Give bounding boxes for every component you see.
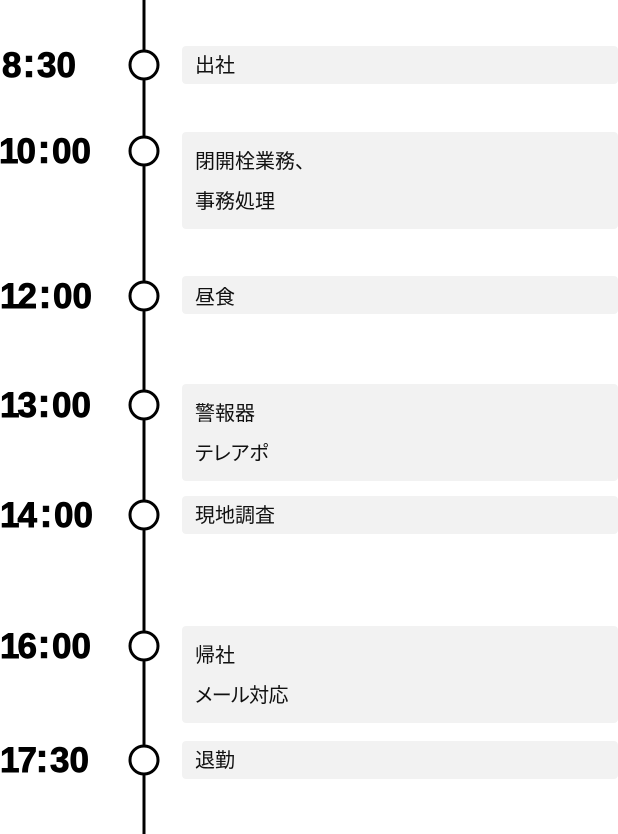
time: 13:00: : — [37, 379, 51, 426]
task: 退勤 — [182, 741, 618, 779]
time: 16:00: 00 — [52, 627, 91, 666]
time: 13:00: 13 — [0, 386, 35, 425]
task: 退勤: 退勤 — [195, 750, 235, 772]
time: 14:00: 14 — [0, 496, 35, 535]
time: 16:00: : — [37, 620, 51, 667]
time: 12:00: 00 — [53, 277, 92, 316]
task: 帰社、メール対応 — [182, 626, 618, 723]
task: 警報器テレアポ: テレアポ — [195, 443, 269, 465]
task: 閉開栓業務、事務処理 — [182, 132, 618, 229]
task: 帰社、メール対応: 帰社 — [195, 645, 235, 667]
time: 12:00: : — [38, 270, 52, 317]
time: 10:00 — [0, 125, 91, 172]
time: 8:30 — [2, 39, 76, 86]
time: 8:30: 30 — [37, 46, 76, 85]
time: 16:00 — [0, 620, 91, 667]
task: 帰社、メール対応: メール対応 — [195, 685, 288, 707]
task: 出社: 出社 — [195, 55, 235, 77]
time: 10:00: 00 — [52, 132, 91, 171]
time: 8:30: : — [22, 39, 36, 86]
time: 12:00 — [0, 270, 92, 317]
time: 14:00: : — [39, 489, 53, 536]
task: 昼食: 昼食 — [195, 287, 235, 309]
task: 警報器テレアポ — [182, 384, 618, 481]
task: 閉開栓業務、事務処理: 閉開栓業務、 — [195, 151, 305, 173]
time: 17:30: : — [35, 734, 49, 781]
time: 8:30: 8 — [2, 46, 19, 85]
time: 12:00: 12 — [0, 277, 35, 316]
time: 10:00: 10 — [0, 132, 34, 171]
task: 現地調査: 現地調査 — [195, 505, 275, 527]
time: 14:00: 00 — [54, 496, 93, 535]
time: 14:00 — [0, 489, 93, 536]
time: 17:30: 30 — [50, 741, 89, 780]
task: 昼食 — [182, 276, 618, 314]
task: 警報器テレアポ: 警報器 — [195, 403, 255, 425]
time: 17:30: 17 — [0, 741, 35, 780]
time: 13:00: 00 — [52, 386, 91, 425]
task: 現地調査 — [182, 496, 618, 534]
task: 閉開栓業務、事務処理: 事務処理 — [195, 191, 275, 213]
task: 出社 — [182, 46, 618, 84]
time: 17:30 — [0, 734, 89, 781]
time: 13:00 — [0, 379, 91, 426]
time: 10:00: : — [37, 125, 51, 172]
time: 16:00: 16 — [0, 627, 35, 666]
